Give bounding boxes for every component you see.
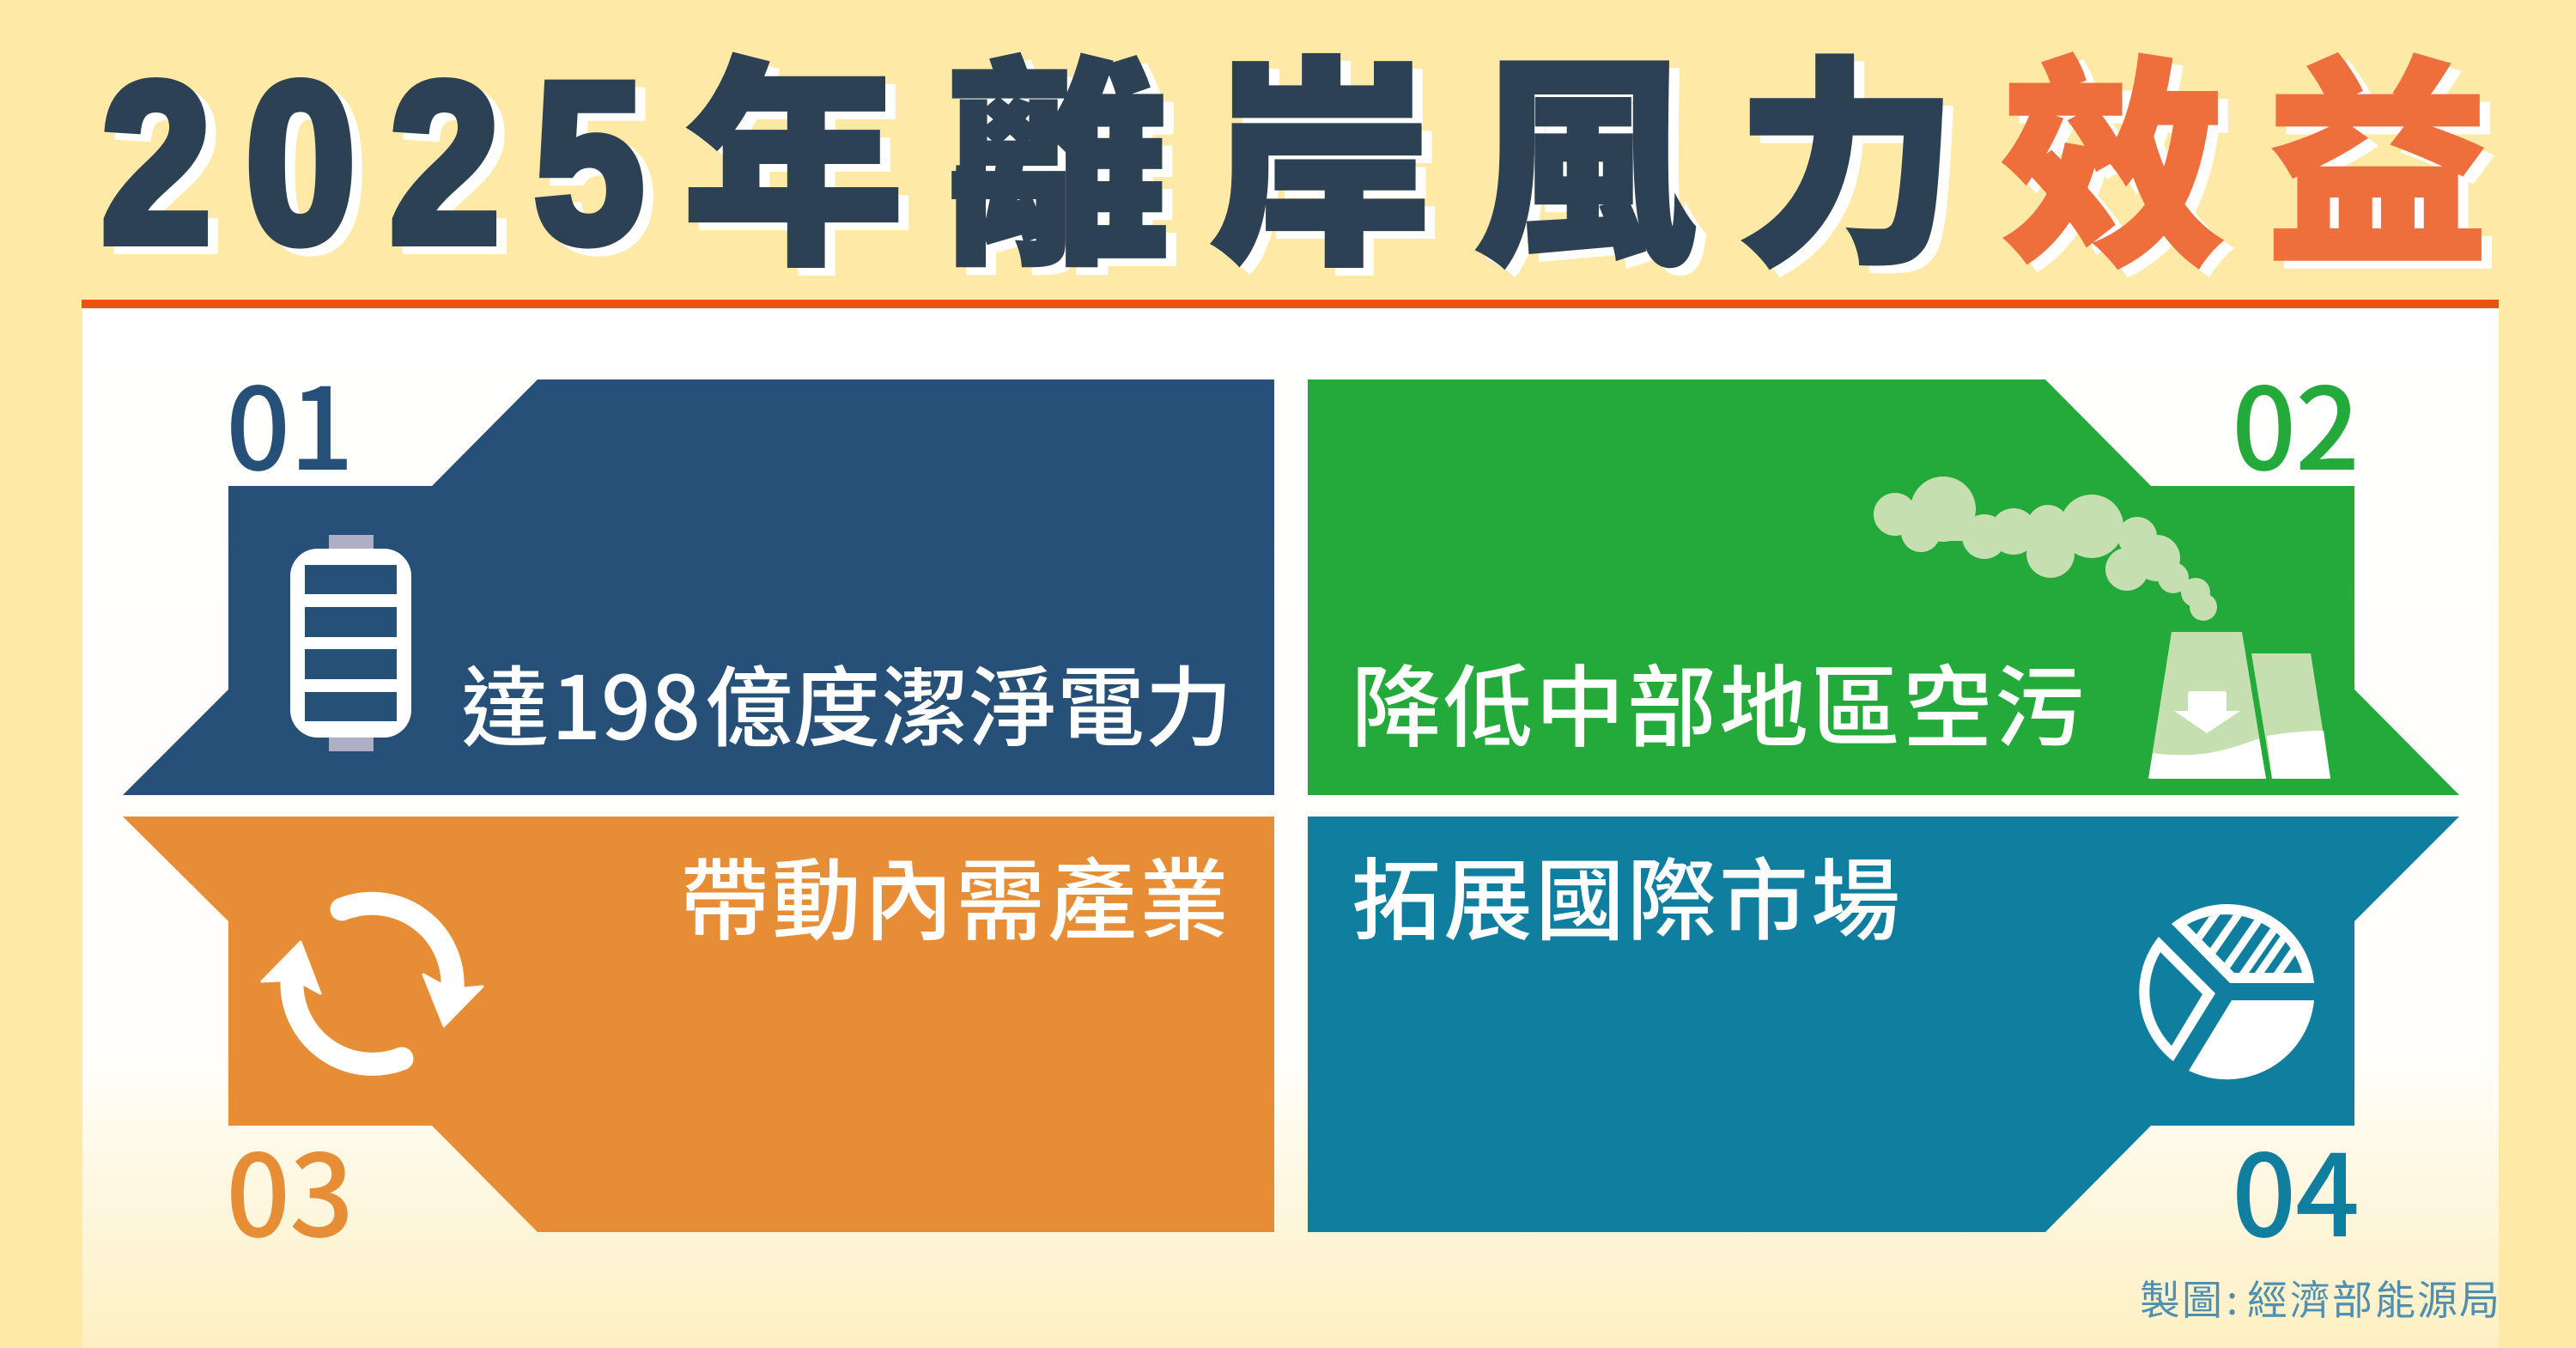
panel 01: clean electricity xyxy=(123,339,1274,795)
title xyxy=(101,0,2499,317)
number 03: 03 xyxy=(226,1106,354,1270)
icon: pie chart xyxy=(2139,904,2314,1079)
text: expand international markets: 拓展國際市場 xyxy=(1352,829,1900,958)
text: 198 billion kWh: 達198億度潔淨電力 xyxy=(461,639,1233,765)
title: 年離岸風力 xyxy=(693,0,1968,317)
number 04: 04 xyxy=(2232,1106,2360,1270)
source credit: 製圖:經濟部能源局 xyxy=(2140,1267,2500,1327)
icon: smoke xyxy=(1874,477,2217,621)
panel 02: reduce air pollution xyxy=(1308,339,2459,795)
text: drive domestic demand: 帶動內需產業 xyxy=(680,829,1229,958)
title: 2025 xyxy=(101,35,644,290)
icon: cycle arrows xyxy=(262,903,483,1064)
title: 效益 xyxy=(2013,0,2499,317)
title: 2025 xyxy=(112,43,654,298)
icon: cooling towers xyxy=(2148,632,2330,779)
number 02: 02 xyxy=(2232,339,2360,503)
text: reduce central air pollution: 降低中部地區空污 xyxy=(1352,635,2084,765)
number 01: 01 xyxy=(226,339,354,503)
panel 04: international markets xyxy=(1308,817,2459,1270)
icon: battery xyxy=(290,535,411,751)
panel 03: domestic industries xyxy=(123,817,1274,1270)
